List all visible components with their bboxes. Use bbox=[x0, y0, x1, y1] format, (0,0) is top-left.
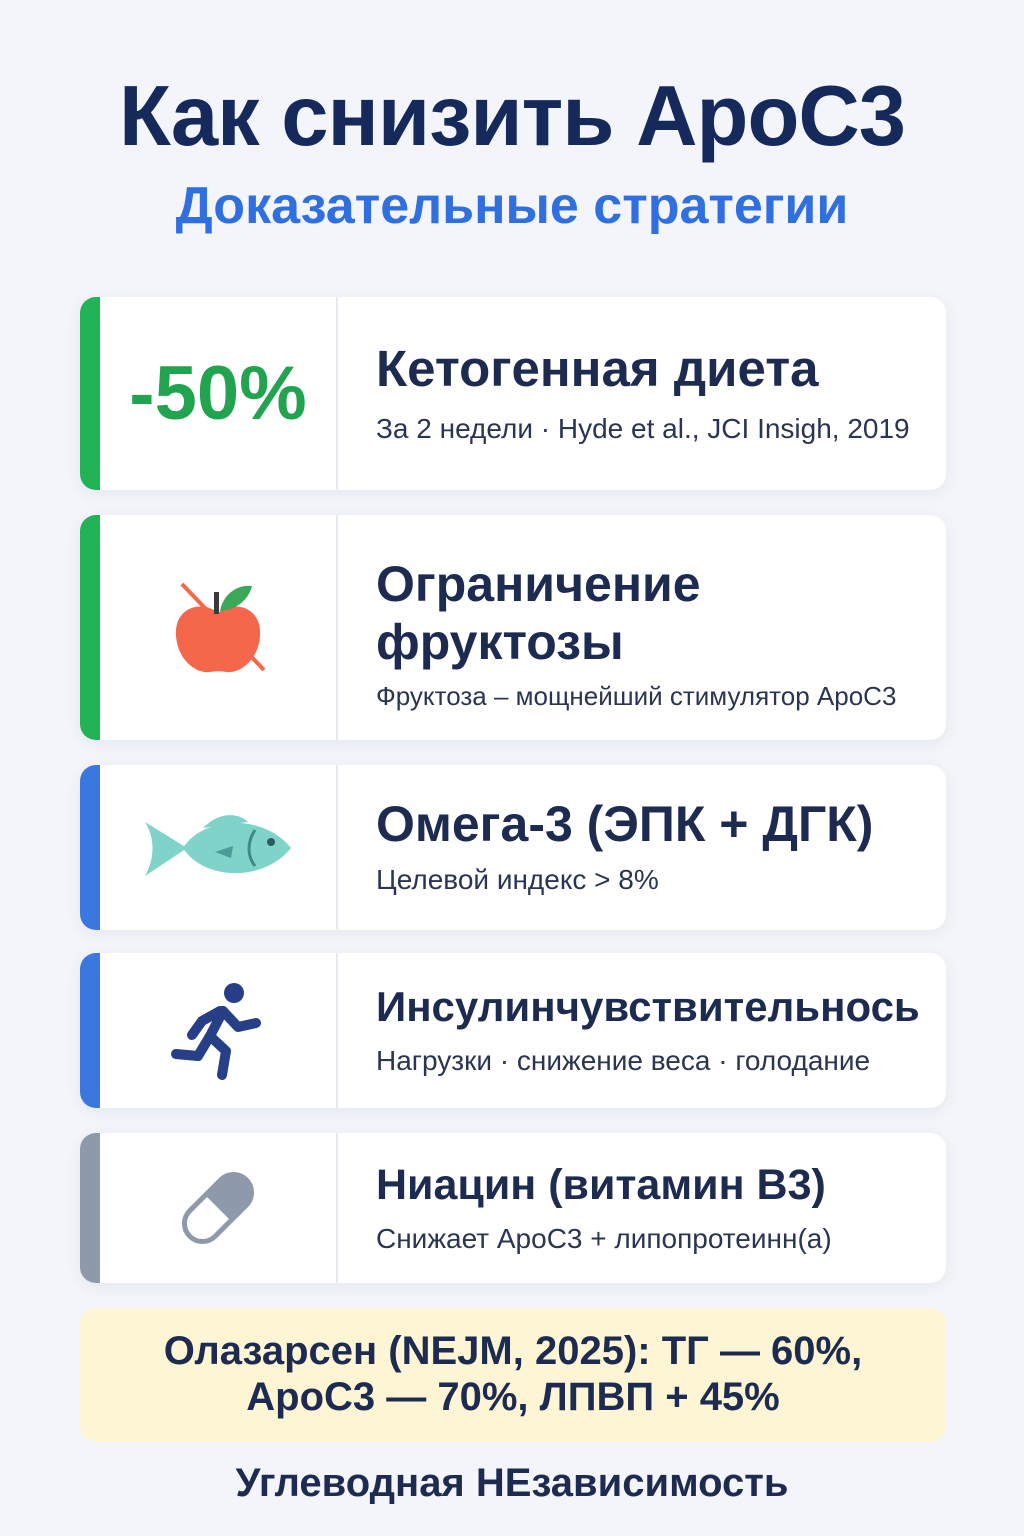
description: Целевой индекс > 8% bbox=[376, 864, 659, 895]
icon: runner bbox=[171, 983, 261, 1080]
description: Снижает ApoC3 + липопротеинн(а) bbox=[376, 1223, 832, 1254]
panel: insulin bbox=[80, 953, 946, 1108]
icon: crossed apple bbox=[176, 582, 266, 672]
callout: olezarsen: Олазарсен (NEJM, 2025): ТГ — 60%, bbox=[164, 1329, 862, 1373]
title: Как снизить ApoC3 bbox=[119, 69, 905, 164]
heading: niacin: Ниацин (витамин B3) bbox=[376, 1161, 826, 1209]
heading: fructose bbox=[376, 556, 701, 670]
icon: fish bbox=[145, 815, 291, 876]
callout: olezarsen: ApoC3 — 70%, ЛПВП + 45% bbox=[246, 1375, 780, 1419]
panel: omega-3 bbox=[80, 765, 946, 930]
heading: omega: Омега-3 (ЭПК + ДГК) bbox=[376, 796, 873, 852]
heading: fructose: фруктозы bbox=[376, 614, 624, 670]
stat: -50%: -50% bbox=[129, 351, 307, 436]
panel: niacin bbox=[80, 1133, 946, 1283]
panel: fructose bbox=[80, 515, 946, 740]
icon: pill bbox=[182, 1172, 254, 1244]
heading: insulin: Инсулинчувствительнось bbox=[376, 983, 920, 1030]
heading: fructose: Ограничение bbox=[376, 556, 701, 612]
panel: keto bbox=[80, 297, 946, 490]
source text: За 2 недели · Hyde et al., JCI Insigh, 2019 bbox=[376, 413, 910, 444]
subtitle: Доказательные стратегии bbox=[176, 177, 848, 235]
description: Нагрузки · снижение веса · голодание bbox=[376, 1045, 870, 1076]
footer: Углеводная НЕзависимость bbox=[236, 1461, 788, 1505]
description: Фруктоза – мощнейший стимулятор ApoC3 bbox=[376, 681, 896, 711]
callout: olezarsen bbox=[80, 1308, 946, 1442]
heading: keto: Кетогенная диета bbox=[376, 340, 819, 397]
